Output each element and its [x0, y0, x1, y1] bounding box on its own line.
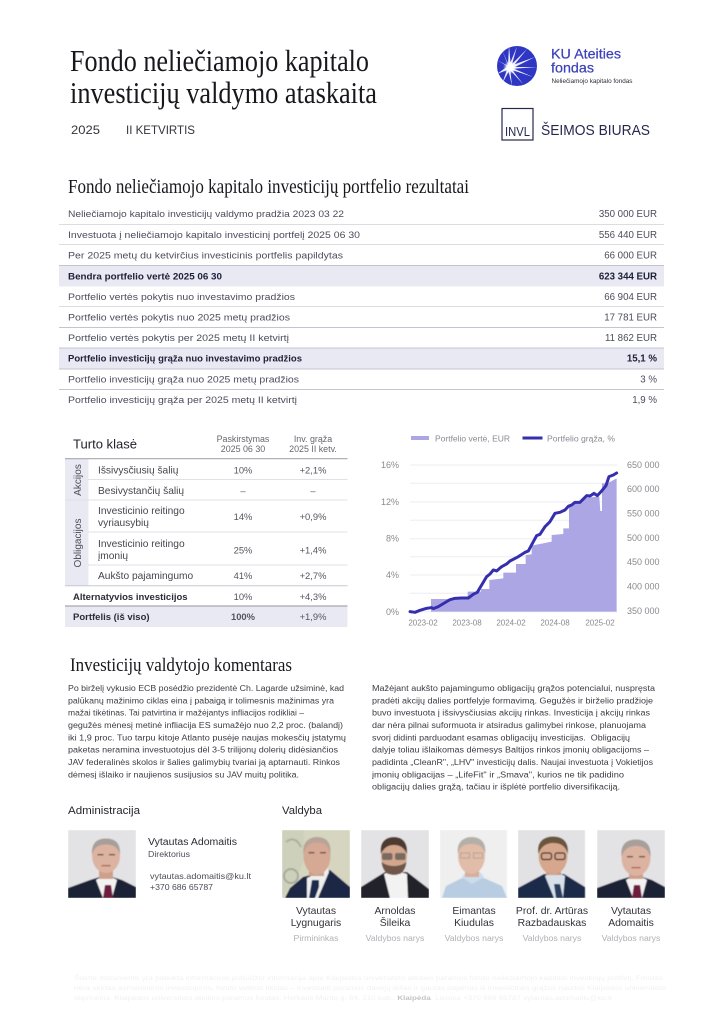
- footer disclaimer: [74, 973, 666, 1002]
- text block: commentary left: iki 1,9 proc. Tuo tarpu kitoje Atlanto pusėje naujas mokesčių įstatymų: [68, 733, 347, 742]
- x axis: 2024-02: [496, 618, 526, 628]
- chart legend: Portfelio grąža, %: [547, 434, 615, 444]
- footer disclaimer: stiprinimui. Klaipėdos universiteto ateities paramos fondas, Herkaus Manto g. 84, 210 kab., Klaipėda . Lietuva +370 686 65787 vytautas.adomaitis@ku.lt: [74, 995, 612, 1002]
- row: value change 2025: Portfelio vertės pokytis nuo 2025 metų pradžios: [68, 312, 291, 322]
- text block: commentary left: Po birželį vykusio ECB posėdžio prezidentė Ch. Lagarde užsiminė, kad: [68, 684, 344, 693]
- row: topped up: 66 000 EUR: [604, 250, 657, 262]
- row: corporate bonds: Investicinio reitingo: [98, 539, 185, 550]
- left axis: 16%: [381, 460, 399, 470]
- text block: commentary right: padidinta „CleanR", „LHV" investicijų dalis. Naujai investuota į Vokietijos: [372, 758, 653, 767]
- text block: commentary right: buvo investuota į išsivysčiusias akcijų rinkas. Investicija į akcijų rinkas: [372, 709, 650, 718]
- row: government bonds: +0,9%: [300, 511, 326, 522]
- row: invested: 556 440 EUR: [599, 230, 657, 241]
- left axis: 8%: [386, 534, 399, 544]
- right axis: 350 000: [627, 606, 660, 616]
- row: emerging markets: Besivystančių šalių: [98, 486, 184, 497]
- row: total value: 623 344 EUR: [599, 272, 657, 282]
- right axis: 400 000: [627, 582, 660, 592]
- text block: commentary right: obligacijų dalies grąžą, tačiau ir išplėtė portfelio diversifikaciją.: [372, 783, 620, 792]
- caption: Vytautas Adomaitis: Valdybos narys: [602, 933, 661, 943]
- row: alternatives: +4,3%: [300, 591, 326, 602]
- row: return 2025: Portfelio investicijų grąža nuo 2025 metų pradžios: [68, 374, 300, 384]
- text block: director contact: Vytautas Adomaitis: [148, 837, 237, 848]
- row: return 2025: 3 %: [640, 374, 657, 386]
- heading: portfolio results: Fondo neliečiamojo kapitalo investicijų portfelio rezultatai: [68, 177, 469, 198]
- photo: Vytautas Lygnugaris: [282, 830, 350, 898]
- text block: director contact: +370 686 65787: [150, 882, 213, 892]
- row: corporate bonds: [98, 539, 326, 562]
- row: developed markets: Išsivysčiusių šalių: [98, 466, 179, 476]
- row: developed markets: 10%: [234, 464, 252, 476]
- row: start: [68, 209, 657, 220]
- logo: INVL Šeimos biuras: [502, 108, 650, 140]
- row: alternatives: 10%: [234, 591, 252, 602]
- table heading: Turto klasė: [73, 436, 137, 452]
- left axis: [381, 460, 399, 617]
- caption: Eimantas Kiudulas: Eimantas: [452, 906, 496, 917]
- row: portfolio total: +1,9%: [300, 611, 326, 622]
- title: [70, 43, 377, 110]
- text block: commentary right: [372, 684, 656, 792]
- text block: commentary right: dalyje toliau išlaikomas dėmesys Baltijos rinkos įmonių obligacijoms –: [372, 746, 650, 755]
- right axis: 550 000: [627, 508, 660, 518]
- table heading: Paskirstymas: [217, 434, 270, 444]
- text block: commentary left: [68, 684, 347, 779]
- value area: [431, 478, 617, 612]
- title: Fondo neliečiamojo kapitalo: [70, 43, 369, 78]
- row label: Obligacijos: Obligacijos: [73, 519, 84, 567]
- chart legend: [411, 434, 615, 444]
- footer disclaimer: Šiame dokumente yra pateikta informacinio pobūdžio informacija apie Klaipėdos universiteto ateities paramos fondo neliečiamojo kapitalo investicijų portfelį. Fondas: [74, 973, 664, 982]
- right axis: 650 000: [627, 460, 660, 470]
- table heading: 2025 06 30: [221, 444, 265, 454]
- left axis: 4%: [386, 570, 399, 580]
- left axis: 12%: [381, 497, 399, 507]
- caption: Arnoldas Šileika: Arnoldas: [374, 906, 416, 917]
- report period: [71, 125, 195, 137]
- caption: Arnoldas Šileika: Valdybos narys: [366, 933, 425, 943]
- heading: administration: Administracija: [68, 805, 141, 817]
- text block: commentary left: paketas neramina investuotojus dėl 3-5 trilijonų dolerių didėsiančios: [68, 746, 338, 755]
- photo: Artūras Razbadauskas: [518, 830, 585, 898]
- row: portfolio total: 100%: [231, 611, 256, 622]
- caption: Eimantas Kiudulas: Kiudulas: [454, 918, 494, 929]
- panel: asset class table: [65, 434, 348, 627]
- caption: Eimantas Kiudulas: Valdybos narys: [445, 933, 504, 943]
- text block: commentary left: palūkanų mažinimo ciklas eina į pabaigą ir tolimesnis mažinimas yra: [68, 696, 335, 705]
- title: investicijų valdymo ataskaita: [70, 75, 377, 110]
- row: total value: [68, 272, 657, 282]
- text block: director contact: [148, 837, 252, 892]
- caption: Vytautas Lygnugaris: Vytautas: [296, 906, 336, 917]
- row: high yield: Aukšto pajamingumo: [98, 571, 193, 582]
- row: value change Q2: [68, 333, 657, 344]
- x axis: 2023-02: [408, 618, 438, 628]
- row: return Q2: [68, 395, 657, 406]
- caption: Eimantas Kiudulas: [445, 906, 504, 943]
- row: start: Neliečiamojo kapitalo investicijų valdymo pradžia 2023 03 22: [68, 209, 344, 219]
- row: return since start: [68, 354, 657, 364]
- row: value change since start: [68, 292, 657, 303]
- left axis: 0%: [386, 607, 399, 617]
- row: invested: [68, 230, 657, 241]
- text block: commentary left: gegužės mėnesį metinė infliacija ES sumažėjo nuo 2,2 proc. (balandį): [68, 721, 343, 730]
- caption: Arnoldas Šileika: Šileika: [380, 916, 411, 929]
- caption: Vytautas Lygnugaris: Pirmininkas: [294, 933, 339, 943]
- row: total value: Bendra portfelio vertė 2025 06 30: [68, 272, 222, 282]
- caption: Vytautas Adomaitis: Adomaitis: [608, 918, 654, 929]
- text block: director contact: vytautas.adomaitis@ku.lt: [150, 871, 252, 881]
- row: value change since start: 66 904 EUR: [604, 292, 657, 303]
- logo: KU Ateities fondas: Neliečiamojo kapitalo fondas: [552, 79, 632, 85]
- row: topped up: Per 2025 metų du ketvirčius investicinis portfelis papildytas: [68, 250, 344, 260]
- logo: KU Ateities fondas: [497, 46, 632, 86]
- row: return since start: Portfelio investicijų grąža nuo investavimo pradžios: [68, 354, 302, 364]
- text block: commentary right: dar nėra pilnai suformuota ir atsiradus galimybei rinkose, planuojama: [372, 721, 647, 730]
- right axis: [627, 460, 660, 616]
- caption: Artūras Razbadauskas: [516, 906, 588, 943]
- row: government bonds: Investicinio reitingo: [98, 506, 185, 517]
- x axis: 2024-08: [540, 618, 570, 628]
- row: alternatives: Alternatyvios investicijos: [73, 592, 188, 603]
- text block: commentary right: pradėti akcijų dalies portfelyje formavimą. Gegužės ir birželio pradžioje: [372, 696, 654, 705]
- report period: 2025: [71, 125, 100, 137]
- text block: commentary left: mažai tikėtinas. Tai patvirtina ir mažėjantys infliacijos rodikliai –: [68, 709, 305, 718]
- text block: commentary left: JAV federalinės skolos ir šalies galimybių tvariai ją aptarnauti. Rinkos: [68, 758, 340, 767]
- row: alternatives: [73, 591, 326, 603]
- table heading: Inv. grąža: [294, 434, 332, 444]
- caption: Vytautas Lygnugaris: [291, 906, 341, 943]
- caption: Artūras Razbadauskas: Prof. dr. Artūras: [516, 906, 588, 917]
- row: corporate bonds: įmonių: [98, 551, 128, 562]
- text block: director contact: Direktorius: [148, 850, 190, 859]
- text block: commentary right: svorį didinti parduodant esamas obligacijų investicijas. Obligacijų: [372, 733, 631, 742]
- return line: [410, 473, 617, 612]
- row: government bonds: [98, 506, 326, 529]
- row: developed markets: +2,1%: [300, 464, 326, 476]
- row: emerging markets: [98, 485, 316, 497]
- row: value change 2025: [68, 312, 657, 324]
- chart legend: Portfelio vertė, EUR: [435, 434, 510, 444]
- logo: KU Ateities fondas: KU Ateities: [551, 46, 621, 62]
- heading: manager commentary: Investicijų valdytojo komentaras: [70, 655, 292, 676]
- row: portfolio total: [73, 611, 326, 623]
- photo: Vytautas Adomaitis, director: [68, 830, 136, 898]
- caption: Arnoldas Šileika: [366, 906, 425, 943]
- right axis: 600 000: [627, 484, 660, 494]
- x axis: 2025-02: [585, 618, 615, 628]
- row: high yield: +2,7%: [300, 570, 326, 581]
- row: value change 2025: 17 781 EUR: [604, 312, 657, 324]
- row: government bonds: 14%: [234, 511, 252, 522]
- row: topped up: [68, 250, 657, 262]
- row: return 2025: [68, 374, 657, 386]
- row: government bonds: vyriausybių: [98, 518, 149, 529]
- row: return Q2: 1,9 %: [632, 395, 657, 406]
- photo: Eimantas Kiudulas: [440, 830, 507, 898]
- caption: Artūras Razbadauskas: Valdybos narys: [523, 933, 582, 943]
- caption: Vytautas Adomaitis: [602, 906, 661, 943]
- footer disclaimer: nėra skirtas asmeninėms investicijoms, fondo veiklos tikslas – investuoti paramos davėjų lėšas ir gautas pajamas iš investicinės grąžos naudoti Klaipėdos universiteto: [74, 985, 666, 992]
- panel: portfolio results table: [59, 209, 664, 406]
- x axis: [408, 618, 615, 628]
- row label: Akcijos: Akcijos: [73, 464, 84, 496]
- right axis: 500 000: [627, 533, 660, 543]
- row: portfolio total: Portfelis (iš viso): [73, 612, 150, 623]
- text block: commentary right: Mažėjant aukšto pajamingumo obligacijų grąžos potencialui, nuspręsta: [372, 684, 656, 693]
- row: value change since start: Portfelio vertės pokytis nuo investavimo pradžios: [68, 292, 296, 302]
- row: return Q2: Portfelio investicijų grąža per 2025 metų II ketvirtį: [68, 395, 297, 405]
- table heading: 2025 II ketv.: [289, 444, 337, 454]
- row: emerging markets: –: [310, 485, 316, 496]
- caption: Vytautas Adomaitis: Vytautas: [611, 906, 651, 917]
- chart: portfolio value and return: [381, 434, 660, 628]
- caption: Vytautas Lygnugaris: Lygnugaris: [291, 918, 341, 929]
- row: high yield: [98, 570, 326, 582]
- row: return since start: 15,1 %: [627, 354, 657, 364]
- right axis: 450 000: [627, 557, 660, 567]
- row: start: 350 000 EUR: [599, 209, 657, 220]
- report period: II KETVIRTIS: [126, 125, 195, 137]
- logo: INVL Šeimos biuras: INVL: [505, 125, 530, 139]
- caption: Artūras Razbadauskas: Razbadauskas: [518, 918, 586, 929]
- logo: KU Ateities fondas: fondas: [551, 60, 594, 76]
- heading: board: Valdyba: [282, 805, 323, 817]
- row: value change Q2: Portfelio vertės pokytis per 2025 metų II ketvirtį: [68, 333, 289, 343]
- row: corporate bonds: +1,4%: [300, 544, 326, 556]
- photo: Vytautas Adomaitis, board: [597, 830, 665, 898]
- text block: commentary right: įmonių obligacijas – „LifeFit" ir „Smava", kurios ne tik padidino: [372, 770, 625, 779]
- row: corporate bonds: 25%: [234, 544, 252, 556]
- row: value change Q2: 11 862 EUR: [605, 333, 657, 344]
- row: high yield: 41%: [234, 570, 252, 581]
- x axis: 2023-08: [452, 618, 482, 628]
- table heading: [73, 434, 337, 454]
- row: emerging markets: –: [240, 485, 246, 496]
- photo: Arnoldas Šileika: [361, 830, 429, 898]
- text block: commentary left: dėmesį išlaiko ir naujienos susijusios su JAV muitų politika.: [68, 770, 299, 779]
- row: invested: Investuota į neliečiamojo kapitalo investicinį portfelį 2025 06 30: [68, 230, 360, 240]
- row: developed markets: [98, 464, 326, 476]
- logo: INVL Šeimos biuras: ŠEIMOS BIURAS: [541, 122, 650, 139]
